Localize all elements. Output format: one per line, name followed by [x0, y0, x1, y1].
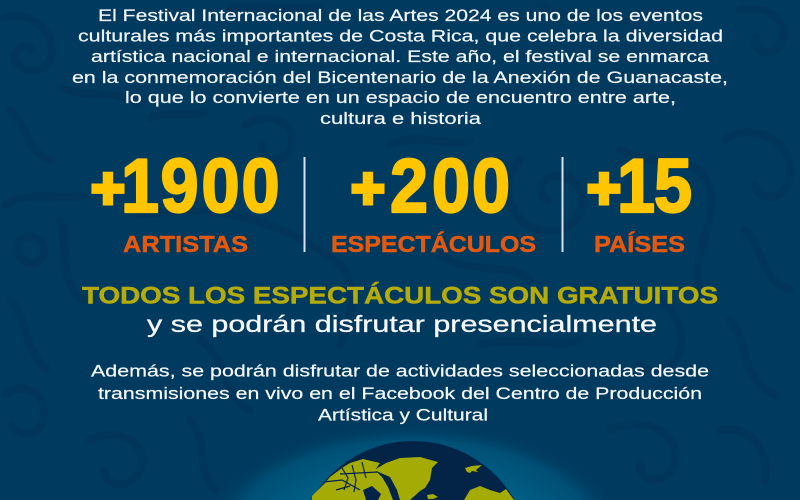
intro paragraph: cultura e historia — [320, 110, 482, 128]
intro paragraph: El Festival Internacional de las Artes 2024 es uno de los eventos — [98, 7, 703, 25]
stat: artistas: 1900 — [121, 145, 280, 229]
stat: paises: + — [587, 156, 621, 221]
continent: Scandinavia — [464, 486, 514, 500]
divider — [562, 157, 564, 252]
streaming paragraph — [91, 362, 709, 425]
stat: artistas — [91, 145, 280, 257]
stat: espectaculos — [331, 145, 536, 257]
subheading: y se podrán disfrutar presencialmente — [147, 311, 657, 337]
continent: Canadian arctic — [312, 459, 393, 500]
stat: paises: 15 — [617, 145, 692, 229]
intro paragraph: en la conmemoración del Bicentenario de la Anexión de Guanacaste, — [72, 69, 728, 87]
intro paragraph: lo que lo convierte en un espacio de encuentro entre arte, — [125, 89, 676, 107]
intro paragraph: culturales más importantes de Costa Rica, que celebra la diversidad — [78, 28, 723, 46]
stat: paises — [587, 145, 692, 257]
heading: free shows: TODOS LOS ESPECTÁCULOS SON GRATUITOS — [82, 282, 718, 310]
streaming paragraph: Además, se podrán disfrutar de actividades seleccionadas desde — [91, 362, 709, 381]
continent: Iceland — [427, 494, 438, 499]
continent: Svalbard — [465, 465, 482, 473]
stat: artistas: + — [91, 156, 125, 221]
intro paragraph: artística nacional e internacional. Este año, el festival se enmarca — [91, 48, 710, 66]
stat: artistas: ARTISTAS — [123, 231, 248, 257]
globe glow — [198, 422, 628, 500]
divider — [304, 157, 306, 252]
stat: espectaculos: + — [351, 156, 385, 221]
stat: paises: PAÍSES — [594, 230, 685, 257]
continent: Greenland — [374, 457, 438, 500]
intro paragraph — [72, 7, 728, 128]
stat: espectaculos: 200 — [390, 145, 510, 229]
stat: espectaculos: ESPECTÁCULOS — [331, 230, 536, 257]
icon: globe — [311, 441, 515, 500]
streaming paragraph: Artística y Cultural — [318, 406, 488, 425]
streaming paragraph: transmisiones en vivo en el Facebook del Centro de Producción — [98, 384, 702, 403]
